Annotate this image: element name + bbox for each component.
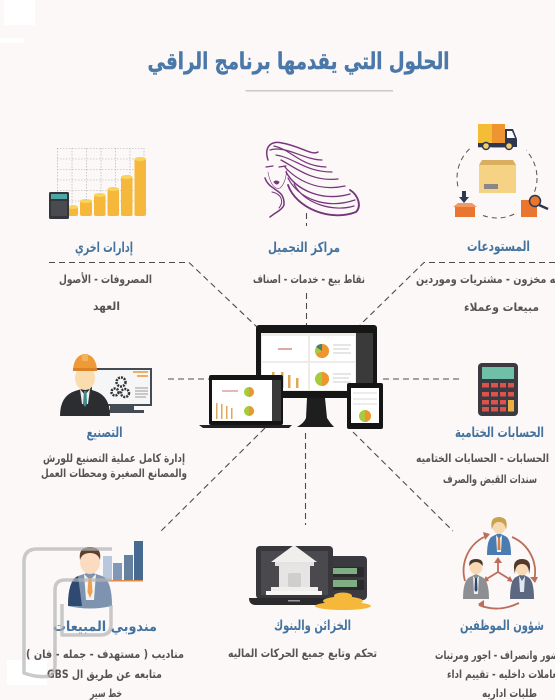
heading: beauty centers: مراكز التجميل [268, 240, 340, 256]
text: sales representatives line 2: متابعه عن طريق ال GBS [47, 667, 162, 681]
connector lines [49, 213, 555, 532]
text: employee affairs line 3: طلبات اداريه [482, 686, 537, 700]
desktop monitor [256, 325, 377, 427]
text: treasuries and banks details: تحكم وتابع جميع الحركات الماليه [228, 646, 377, 661]
laptop [199, 375, 292, 428]
icon: coin growth chart with calculator [49, 148, 146, 219]
tablet [347, 383, 383, 429]
icon: sales representative with bars [68, 541, 143, 608]
icon: bank on laptop with money and coins [249, 545, 371, 610]
watermark [7, 549, 112, 685]
text: beauty centers details: نقاط بيع - خدمات - اصناف [253, 272, 365, 286]
heading: sales representatives: مندوبي المبيعات [53, 619, 157, 635]
employee: right [510, 559, 534, 599]
text: other departments line 2: العهد [93, 299, 120, 313]
heading: other departments: إدارات اخري [75, 240, 133, 257]
icon: beauty woman with flowing hair [265, 142, 359, 217]
text: manufacturing line 1: إدارة كامل عملية التصنيع للورش [43, 451, 185, 466]
heading: treasuries and banks: الخزائن والبنوك [274, 618, 351, 634]
icon: calculator [478, 363, 518, 416]
title: الحلول التي يقدمها برنامج الراقي [148, 49, 450, 75]
text: other departments line 1: المصروفات - الأصول [59, 272, 152, 287]
icon: warehouse logistics cycle [450, 118, 548, 220]
employee: left [463, 559, 489, 599]
icon: devices showing dashboards [199, 325, 383, 429]
text: manufacturing line 2: والمصانع الصغيرة ومحطات العمل [41, 466, 187, 481]
text: sales representatives line 3: خط سير [89, 686, 122, 700]
heading: manufacturing: التصنيع [86, 425, 122, 441]
heading: warehouses: المستودعات [467, 239, 530, 255]
text: warehouses details line 2: مبيعات وعملاء [464, 300, 539, 315]
employee: top [487, 517, 511, 555]
text: sales representatives line 1: مناديب ( مستهدف - جمله - فان ) [26, 647, 184, 661]
icon: engineer with monitor [60, 354, 152, 416]
icon: employees network [463, 517, 538, 609]
